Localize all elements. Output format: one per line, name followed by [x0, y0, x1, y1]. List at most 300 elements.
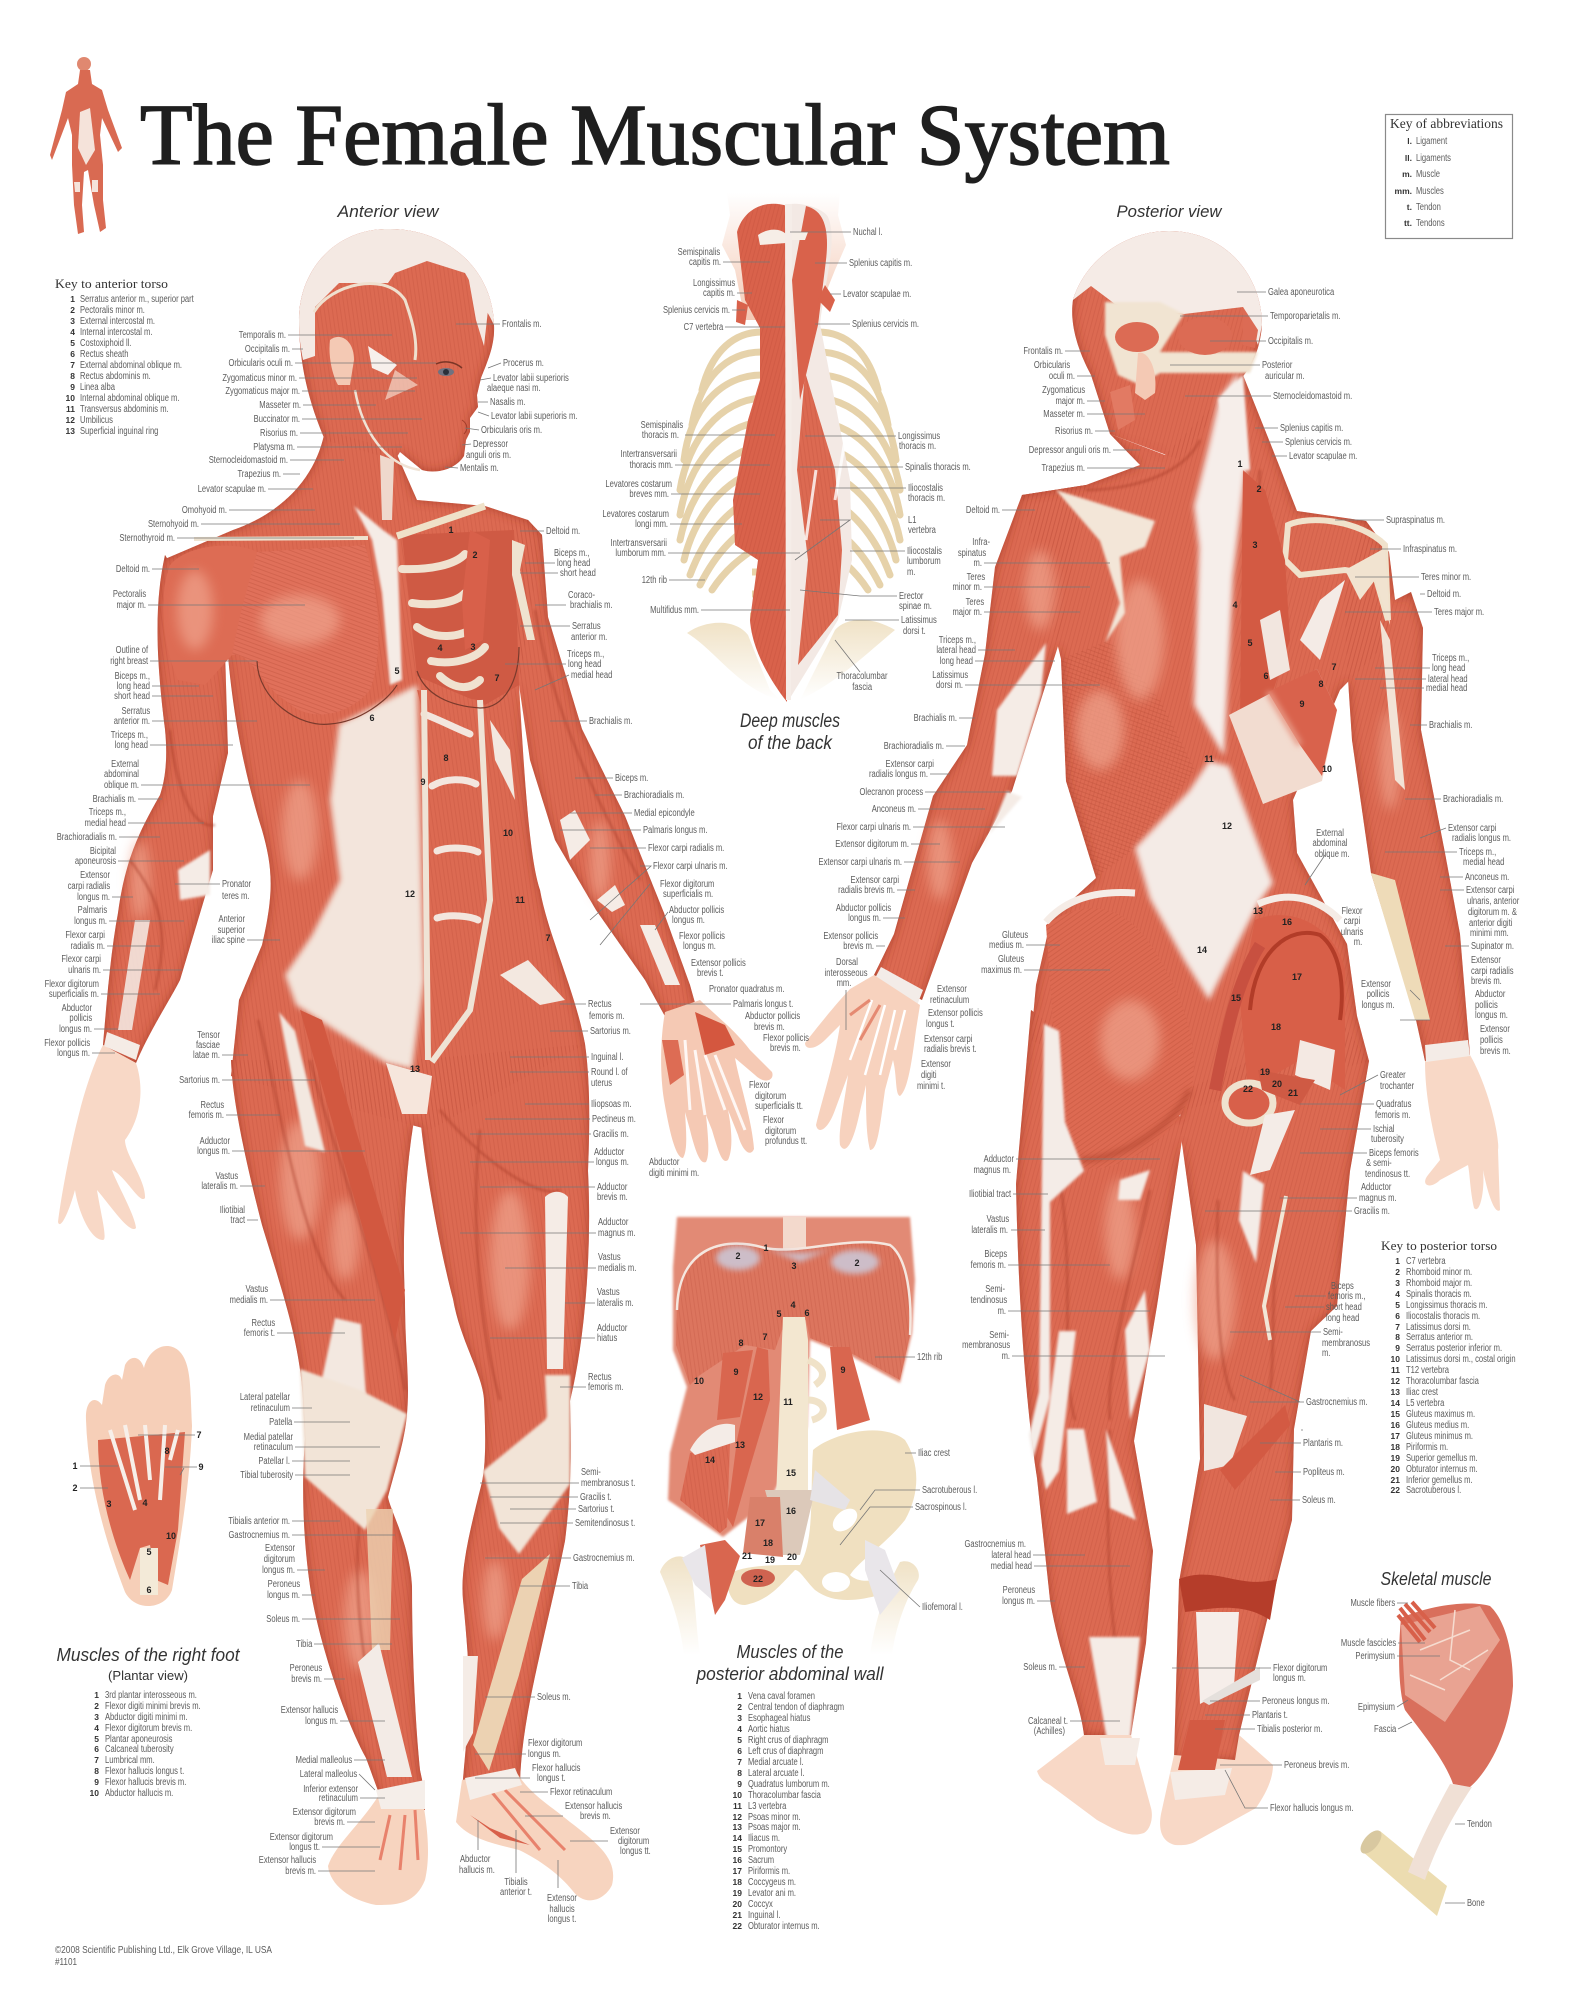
labels: anterior figure, left side: radialis m.	[70, 940, 105, 951]
muscle: lateral strap sartorius	[300, 1010, 405, 1340]
key: foot: Flexor hallucis longus t.	[105, 1765, 184, 1776]
obturator	[741, 1569, 775, 1587]
labels: anterior figure, left side: Tibia	[296, 1638, 313, 1649]
labels	[1341, 1597, 1492, 1908]
tendon: crotch area	[386, 1063, 432, 1114]
labels: anterior figure, left side: Anterior	[218, 913, 245, 924]
key: posterior torso: Iliocostalis thoracis m.	[1406, 1310, 1480, 1321]
labels: deep back: thoracis mm.	[630, 459, 673, 470]
panel: foot plantar view	[86, 1346, 192, 1606]
key: posterior abdominal wall: Coccygeus m.	[748, 1876, 796, 1887]
labels: anterior figure, right side: Soleus m.	[537, 1691, 571, 1702]
labels: deep back: Intertransversarii	[621, 448, 677, 459]
key: posterior torso: 18	[1391, 1442, 1400, 1452]
labels: posterior figure, right side: long head	[1326, 1312, 1359, 1323]
key: posterior abdominal wall: Central tendon of diaphragm	[748, 1701, 844, 1712]
labels: posterior figure, right side: Extensor pollicis	[928, 1007, 983, 1018]
labels: anterior figure, right side: digitorum	[618, 1835, 649, 1846]
labels: posterior figure, right side: Deltoid m.	[1427, 588, 1461, 599]
labels: anterior figure, left side: retinaculum	[254, 1441, 293, 1452]
key: posterior abdominal wall: Levator ani m.	[748, 1887, 796, 1898]
numbers: anterior torso: 3	[470, 642, 476, 652]
neck tendon	[380, 455, 394, 520]
labels: deep back: longi mm.	[635, 518, 668, 529]
labels: abdominal wall: 12th rib	[917, 1351, 942, 1362]
tendon	[1408, 1784, 1472, 1880]
numbers: posterior torso: 15	[1231, 993, 1241, 1003]
labels: deep back: Splenius capitis m.	[849, 257, 912, 268]
labels: anterior figure, left side: Zygomaticus minor m.	[222, 372, 297, 383]
panel: key of abbreviations: t.	[1407, 202, 1412, 212]
muscle: latissimus flap	[1229, 669, 1337, 804]
numbers: posterior torso: 20	[1272, 1079, 1282, 1089]
muscle: deltoid	[163, 546, 257, 685]
labels: anterior figure, right side: Extensor pollicis	[691, 957, 746, 968]
key: posterior torso: 11	[1391, 1365, 1400, 1375]
labels: anterior figure, right side: Procerus m.	[503, 357, 544, 368]
numbers: abdominal wall: 7	[762, 1332, 768, 1342]
labels: anterior figure, left side: Extensor	[265, 1542, 295, 1553]
labels: anterior figure, right side: Pectineus m.	[592, 1113, 636, 1124]
rib shading	[806, 440, 845, 540]
key: posterior torso: 1	[1395, 1256, 1400, 1266]
deep muscles: right of spine	[1240, 470, 1290, 720]
labels: deep back: thoracis m.	[642, 429, 679, 440]
skin: left hand	[805, 975, 920, 1150]
numbers: abdominal wall: 10	[694, 1376, 704, 1386]
labels: posterior figure, right side: digiti	[921, 1069, 937, 1080]
key: posterior abdominal wall: 6	[737, 1746, 742, 1756]
labels: anterior figure, left side: longus m.	[197, 1145, 230, 1156]
labels: posterior figure, right side: abdominal	[1313, 837, 1347, 848]
numbers: abdominal wall: 20	[787, 1552, 797, 1562]
labels: deep back: lumborum	[907, 555, 941, 566]
labels: anterior figure, left side: Abductor	[62, 1002, 92, 1013]
left deep muscles	[733, 204, 787, 702]
key: anterior torso: 4	[70, 327, 75, 337]
labels: anterior figure, left side: teres m.	[222, 890, 249, 901]
labels: posterior figure, right side: Flexor hallucis longus m.	[1270, 1802, 1353, 1813]
numbers: posterior torso: 6	[1263, 671, 1269, 681]
labels: posterior figure, right side: medial head	[1426, 682, 1467, 693]
labels: posterior figure, left side: Brachialis m.	[914, 712, 957, 723]
labels: Muscle fascicles	[1341, 1637, 1397, 1648]
labels: posterior figure, right side: Splenius cervicis m.	[1285, 436, 1352, 447]
key: foot: Flexor digiti minimi brevis m.	[105, 1700, 201, 1711]
labels: anterior figure, right side: Adductor	[597, 1181, 627, 1192]
labels: posterior figure, left side: Peroneus	[1003, 1584, 1036, 1595]
key: posterior torso: Inferior gemellus m.	[1406, 1474, 1473, 1485]
numbers: anterior torso: 5	[394, 666, 400, 676]
nuchal tendon	[758, 230, 808, 245]
numbers: abdominal wall: 9	[733, 1367, 739, 1377]
key: anterior torso: 12	[66, 415, 75, 425]
key: anterior torso: 2	[70, 305, 75, 315]
labels: posterior figure, left side: Masseter m.	[1043, 408, 1085, 419]
tendon: right thigh	[545, 1192, 568, 1369]
labels: posterior figure, left side: oculi m.	[1049, 370, 1075, 381]
labels: anterior figure, right side: Adductor	[594, 1146, 624, 1157]
right wrist band	[1425, 1040, 1470, 1062]
key: posterior torso: 19	[1391, 1453, 1400, 1463]
panel: foot plantar view: 10	[166, 1531, 176, 1541]
key: anterior torso: Umbilicus	[80, 414, 113, 425]
iliacus	[680, 1443, 730, 1533]
pelvis bones	[687, 620, 895, 700]
labels: anterior figure, right side: long head	[568, 658, 601, 669]
labels: anterior figure, right side: brevis t.	[697, 967, 724, 978]
labels: posterior figure, left side: Deltoid m.	[966, 504, 1000, 515]
labels: posterior figure, right side: Temporoparietalis m.	[1270, 310, 1340, 321]
labels: posterior figure, right side	[917, 286, 1519, 1813]
key: posterior torso: Latissimus dorsi m., costal origin	[1406, 1353, 1516, 1364]
key: foot: 8	[94, 1766, 99, 1776]
title: The Female Muscular System	[140, 86, 1170, 183]
labels: anterior figure, right side: long head	[557, 557, 590, 568]
labels: posterior figure, right side: digitorum m. &	[1468, 906, 1517, 917]
numbers: posterior torso: 3	[1252, 540, 1258, 550]
labels: posterior figure, left side: Vastus	[987, 1213, 1010, 1224]
labels: anterior figure, left side: Bicipital	[90, 845, 116, 856]
numbers: abdominal wall: 13	[735, 1440, 745, 1450]
labels: posterior figure, right side: Brachioradialis m.	[1443, 793, 1503, 804]
labels: anterior figure, left side: Medial patellar	[244, 1431, 293, 1442]
labels: deep back: Nuchal l.	[853, 226, 883, 237]
labels: anterior figure, right side: longus m.	[528, 1748, 561, 1759]
panel: anterior figure	[58, 229, 773, 1905]
labels: anterior figure, left side: Sternocleidomastoid m.	[209, 454, 288, 465]
labels: Perimysium	[1355, 1650, 1395, 1661]
key: posterior torso: Serratus posterior inferior m.	[1406, 1342, 1502, 1353]
key: posterior abdominal wall: Iliacus m.	[748, 1832, 780, 1843]
labels: posterior figure, right side: Teres minor m.	[1421, 571, 1471, 582]
panel: foot plantar view: 3	[106, 1499, 112, 1509]
labels: posterior figure, left side: Olecranon process	[859, 786, 924, 797]
labels: anterior figure, left side: Triceps m.,	[89, 806, 126, 817]
labels: deep back: Longissimus	[898, 430, 941, 441]
panel: foot plantar view: 8	[164, 1446, 170, 1456]
heading: muscles of the right foot: Muscles of the right foot	[56, 1645, 240, 1665]
numbers: posterior torso: 5	[1247, 638, 1253, 648]
labels: Tendon	[1467, 1818, 1492, 1829]
panel: key of abbreviations: Ligaments	[1416, 152, 1451, 163]
labels: posterior figure, left side: Extensor carpi	[851, 874, 899, 885]
labels: anterior figure, right side: Palmaris longus m.	[643, 824, 707, 835]
labels: anterior figure, right side: Frontalis m.	[502, 318, 542, 329]
labels: posterior figure, right side: femoris m.,	[1328, 1290, 1365, 1301]
quadratus lumborum left	[717, 1350, 753, 1420]
tendon: thoracic spine aponeurosis	[1194, 373, 1246, 756]
labels: anterior figure, right side: Rectus	[588, 998, 612, 1009]
labels: anterior figure, right side: Vastus	[597, 1286, 620, 1297]
key: foot: Flexor digitorum brevis m.	[105, 1722, 192, 1733]
labels: anterior figure, left side: Triceps m.,	[111, 729, 148, 740]
key: foot: 7	[94, 1755, 99, 1765]
key: posterior abdominal wall: 20	[733, 1899, 742, 1909]
labels: posterior figure, right side: External	[1316, 827, 1344, 838]
numbers: posterior torso: 2	[1256, 484, 1262, 494]
labels: posterior figure, right side: Splenius capitis m.	[1280, 422, 1343, 433]
labels: posterior figure, right side: Popliteus m.	[1303, 1466, 1345, 1477]
key: posterior abdominal wall: Psoas major m.	[748, 1821, 801, 1832]
labels: anterior figure, right side: Deltoid m.	[546, 525, 580, 536]
labels: anterior figure, left side: Serratus	[121, 705, 151, 716]
labels: deep back: Splenius cervicis m.	[852, 318, 919, 329]
labels: deep back: thoracis m.	[908, 492, 945, 503]
key: posterior abdominal wall: 7	[737, 1757, 742, 1767]
key: posterior abdominal wall: 11	[733, 1801, 742, 1811]
labels: anterior figure, left side: tract	[230, 1214, 246, 1225]
key: posterior abdominal wall	[733, 1690, 844, 1931]
skin: right hand	[1425, 1055, 1500, 1211]
labels: deep back: vertebra	[908, 524, 937, 535]
key: foot: 6	[94, 1744, 99, 1754]
labels: posterior figure, left side: longus m.	[848, 912, 881, 923]
labels: anterior figure, right side: longus tt.	[620, 1845, 651, 1856]
pelvis bone	[725, 1430, 916, 1605]
panel: key of abbreviations: Muscle	[1416, 168, 1440, 179]
labels: posterior figure, left side: Latissimus	[932, 669, 969, 680]
labels: anterior figure, left side: fasciae	[196, 1039, 220, 1050]
key: posterior abdominal wall: Piriformis m.	[748, 1865, 790, 1876]
key: posterior abdominal wall: Sacrum	[748, 1854, 774, 1865]
labels: anterior figure, left side: carpi radialis	[68, 880, 111, 891]
bones: tibia and tendons	[358, 1509, 550, 1777]
labels: posterior figure, right side: Extensor carpi	[1466, 884, 1514, 895]
labels: anterior figure, left side: long head	[115, 739, 148, 750]
key: posterior abdominal wall: 10	[733, 1790, 742, 1800]
labels: posterior figure, left side: Extensor carpi	[886, 758, 934, 769]
key: anterior torso: 10	[66, 393, 75, 403]
labels: posterior figure, right side: & semi-	[1366, 1157, 1392, 1168]
labels: anterior figure, left side: Extensor digitorum	[293, 1806, 356, 1817]
spine	[776, 1317, 808, 1500]
key: posterior torso: 2	[1395, 1267, 1400, 1277]
icon: miniature female figure	[50, 57, 122, 234]
labels: posterior figure, right side: Flexor digitorum	[1273, 1662, 1327, 1673]
foot labels	[72, 1430, 204, 1493]
key: anterior torso: Rectus sheath	[80, 348, 128, 359]
labels: anterior figure, right side: hallucis m.	[459, 1864, 495, 1875]
labels: deep back: Iliocostalis	[907, 545, 942, 556]
numbers: posterior torso: 4	[1232, 600, 1238, 610]
key: posterior abdominal wall: 19	[733, 1888, 742, 1898]
psoas	[727, 1347, 770, 1527]
labels: anterior figure, left side: Flexor carpi	[61, 953, 101, 964]
key: posterior torso: 22	[1391, 1485, 1400, 1495]
labels: anterior figure, left side: Pronator	[222, 878, 251, 889]
key: posterior torso: Key to posterior torso	[1381, 1238, 1497, 1253]
labels: anterior figure, right side: Semitendinosus t.	[575, 1517, 635, 1528]
labels: anterior figure, right side: longus m.	[672, 914, 705, 925]
key: posterior abdominal wall: Aortic hiatus	[748, 1723, 790, 1734]
key: foot	[90, 1689, 201, 1798]
labels: posterior figure, left side: major m.	[953, 606, 982, 617]
labels: posterior figure, right side: Extensor	[921, 1058, 951, 1069]
key: posterior abdominal wall: Psoas minor m.	[748, 1811, 801, 1822]
key: posterior torso: 10	[1391, 1354, 1400, 1364]
numbers: posterior torso: 10	[1322, 764, 1332, 774]
thoracolumbar fascia	[690, 1424, 735, 1455]
numbers: abdominal wall: 17	[755, 1518, 765, 1528]
numbers: abdominal wall: 8	[738, 1338, 744, 1348]
numbers: anterior torso: 7	[545, 933, 551, 943]
labels: anterior figure, right side: brevis m.	[580, 1810, 611, 1821]
muscle belly	[1399, 1603, 1513, 1787]
inner edge shading	[103, 229, 697, 1810]
labels: posterior figure, right side: Extensor	[1480, 1023, 1510, 1034]
labels: anterior figure, left side: Palmaris	[78, 904, 108, 915]
labels: anterior figure, left side: Tibialis anterior m.	[228, 1515, 290, 1526]
numbers: anterior torso: 9	[420, 777, 426, 787]
numbers: posterior torso: 22	[1243, 1084, 1253, 1094]
labels: deep back: Latissimus	[901, 614, 937, 625]
labels: anterior figure, right side: Serratus	[572, 620, 601, 631]
labels: posterior figure, right side: Gracilis m.	[1354, 1205, 1390, 1216]
key: posterior torso: Gluteus maximus m.	[1406, 1408, 1475, 1419]
heading: posterior view: Posterior view	[1116, 202, 1223, 221]
labels: anterior figure, right side: profundus tt.	[765, 1135, 807, 1146]
labels: anterior figure, right side: Abductor	[460, 1853, 490, 1864]
labels: posterior figure, right side: Anconeus m.	[1465, 871, 1509, 882]
labels: posterior figure, right side: short head	[1326, 1301, 1362, 1312]
heading: anterior view: Anterior view	[336, 202, 440, 221]
numbers: anterior torso: 7	[494, 673, 500, 683]
copyright: ©2008 Scientific Publishing Ltd., Elk Grove Village, IL USA	[55, 1945, 272, 1956]
tendon: arm right	[1371, 620, 1430, 1020]
key: posterior abdominal wall: Lateral arcuate l.	[748, 1767, 804, 1778]
labels: Epimysium	[1358, 1701, 1395, 1712]
labels: anterior figure, right side: Gracilis t.	[580, 1491, 612, 1502]
muscle highlights	[928, 550, 1400, 1360]
numbers: anterior torso: 1	[448, 525, 454, 535]
labels: anterior figure, right side: femoris m.	[588, 1381, 623, 1392]
labels: posterior figure, right side: Occipitalis m.	[1268, 335, 1313, 346]
forearm tendons	[118, 810, 680, 1030]
labels: anterior figure, left side: longus tt.	[289, 1841, 320, 1852]
right deep muscles	[790, 204, 852, 698]
labels: deep back: Intertransversarii	[611, 537, 667, 548]
numbers: posterior torso: 16	[1282, 917, 1292, 927]
labels: anterior figure, right side: Tibia	[572, 1580, 589, 1591]
labels: posterior figure, left side	[819, 345, 1165, 1736]
key: anterior torso: Pectoralis minor m.	[80, 304, 145, 315]
labels: posterior figure, right side: Adductor	[1361, 1181, 1391, 1192]
labels: deep back: capitis m.	[689, 256, 721, 267]
tendon: right knee	[1204, 1404, 1247, 1471]
labels: anterior figure, left side: Masseter m.	[259, 399, 301, 410]
labels: deep back	[602, 226, 971, 692]
labels: anterior figure, left side: retinaculum	[319, 1792, 358, 1803]
labels: posterior figure, right side: Supraspinatus m.	[1386, 514, 1445, 525]
skin: feet	[328, 1768, 613, 1905]
labels: anterior figure, right side: hiatus	[597, 1332, 618, 1343]
labels: anterior figure, left side: Buccinator m.	[254, 413, 300, 424]
tendon: gluteal arcs	[1046, 892, 1340, 922]
muscle: gluteus maximus	[1046, 908, 1194, 1169]
numbers: abdominal wall: 22	[753, 1574, 763, 1584]
labels: abdominal wall	[840, 1351, 977, 1612]
numbers: anterior torso: 13	[410, 1064, 420, 1074]
labels: posterior figure, right side: Galea aponeurotica	[1268, 286, 1335, 297]
labels: posterior figure, left side: Extensor pollicis	[823, 930, 878, 941]
labels: posterior figure, right side: Ischial	[1373, 1123, 1394, 1134]
key: posterior torso: 4	[1395, 1289, 1400, 1299]
key: anterior torso: 11	[66, 404, 75, 414]
labels: posterior figure, right side: Sternocleidomastoid m.	[1273, 390, 1352, 401]
labels: anterior figure, left side: femoris m.	[189, 1109, 224, 1120]
labels: Bone	[1467, 1897, 1485, 1908]
key: posterior torso: 17	[1391, 1431, 1400, 1441]
key: foot: Calcaneal tuberosity	[105, 1743, 174, 1754]
labels: posterior figure, left side: Adductor	[984, 1153, 1014, 1164]
key: posterior torso: 3	[1395, 1278, 1400, 1288]
labels: posterior figure, left side: tendinosus	[970, 1294, 1008, 1305]
key: posterior abdominal wall: Quadratus lumborum m.	[748, 1778, 830, 1789]
tendon: iliotibial tract	[1029, 1024, 1084, 1459]
labels: anterior figure, left side: Risorius m.	[260, 427, 298, 438]
labels: posterior figure, right side: m.	[1354, 936, 1362, 947]
labels: posterior figure, left side: Semi-	[989, 1329, 1009, 1340]
labels: posterior figure, left side: interosseous	[825, 967, 868, 978]
labels: anterior figure, right side: Vastus	[598, 1251, 621, 1262]
labels: anterior figure, right side: digitorum	[755, 1090, 786, 1101]
labels: anterior figure, left side: brevis m.	[291, 1673, 322, 1684]
key: posterior abdominal wall: 8	[737, 1768, 742, 1778]
labels: anterior figure, right side: Flexor hallucis	[532, 1762, 581, 1773]
labels: anterior figure, left side: Adductor	[200, 1135, 230, 1146]
panel: deep muscles of the back	[680, 193, 900, 702]
labels: anterior figure, left side: Sternothyroid m.	[119, 532, 175, 543]
labels: anterior figure, right side: Flexor carpi radialis m.	[648, 842, 724, 853]
labels: deep back: Thoracolumbar	[836, 670, 888, 681]
labels: posterior figure, right side: Plantaris t.	[1252, 1709, 1288, 1720]
muscle highlights	[130, 570, 610, 1670]
numbers: posterior torso: 12	[1222, 821, 1232, 831]
labels: anterior figure, left side: longus m.	[262, 1564, 295, 1575]
numbers: anterior torso: 12	[405, 889, 415, 899]
labels: posterior figure, right side: carpi	[1344, 915, 1360, 926]
labels: posterior figure, left side: radialis longus m.	[869, 768, 928, 779]
labels: posterior figure, right side: longus t.	[926, 1018, 955, 1029]
foot labels: 7	[196, 1430, 202, 1440]
labels: posterior figure, left side: Gluteus	[998, 953, 1025, 964]
labels: deep back: Levator scapulae m.	[843, 288, 911, 299]
labels: anterior figure, right side: Extensor	[547, 1892, 577, 1903]
muscle: pectoralis major	[232, 545, 378, 714]
key: posterior torso: 13	[1391, 1387, 1400, 1397]
labels: anterior figure, left side: Extensor	[80, 869, 110, 880]
labels: anterior figure, left side: Rectus	[201, 1099, 225, 1110]
labels: posterior figure, right side: radialis longus m.	[1452, 832, 1511, 843]
tendon: left scapula	[1056, 490, 1155, 643]
labels: anterior figure, left side: medialis m.	[230, 1294, 268, 1305]
labels: posterior figure, left side: Trapezius m.	[1041, 462, 1085, 473]
key: posterior torso: 21	[1391, 1475, 1400, 1485]
key: posterior abdominal wall: 5	[737, 1735, 742, 1745]
key: posterior torso: 8	[1395, 1332, 1400, 1342]
labels: anterior figure, right side: Brachioradialis m.	[624, 789, 684, 800]
labels: posterior figure, left side: Infra-	[972, 536, 990, 547]
labels: anterior figure, left side: Trapezius m.	[237, 468, 281, 479]
labels: anterior figure, right side: Adductor	[598, 1216, 628, 1227]
labels: posterior figure, right side: carpi radialis	[1471, 965, 1514, 976]
labels: anterior figure, right side: digiti minimi m.	[649, 1167, 699, 1178]
skin: feet	[1037, 1720, 1273, 1845]
labels: posterior figure, right side: Posterior	[1262, 359, 1292, 370]
labels: posterior figure, left side: m.	[974, 557, 982, 568]
panel: posterior figure	[805, 231, 1500, 1845]
